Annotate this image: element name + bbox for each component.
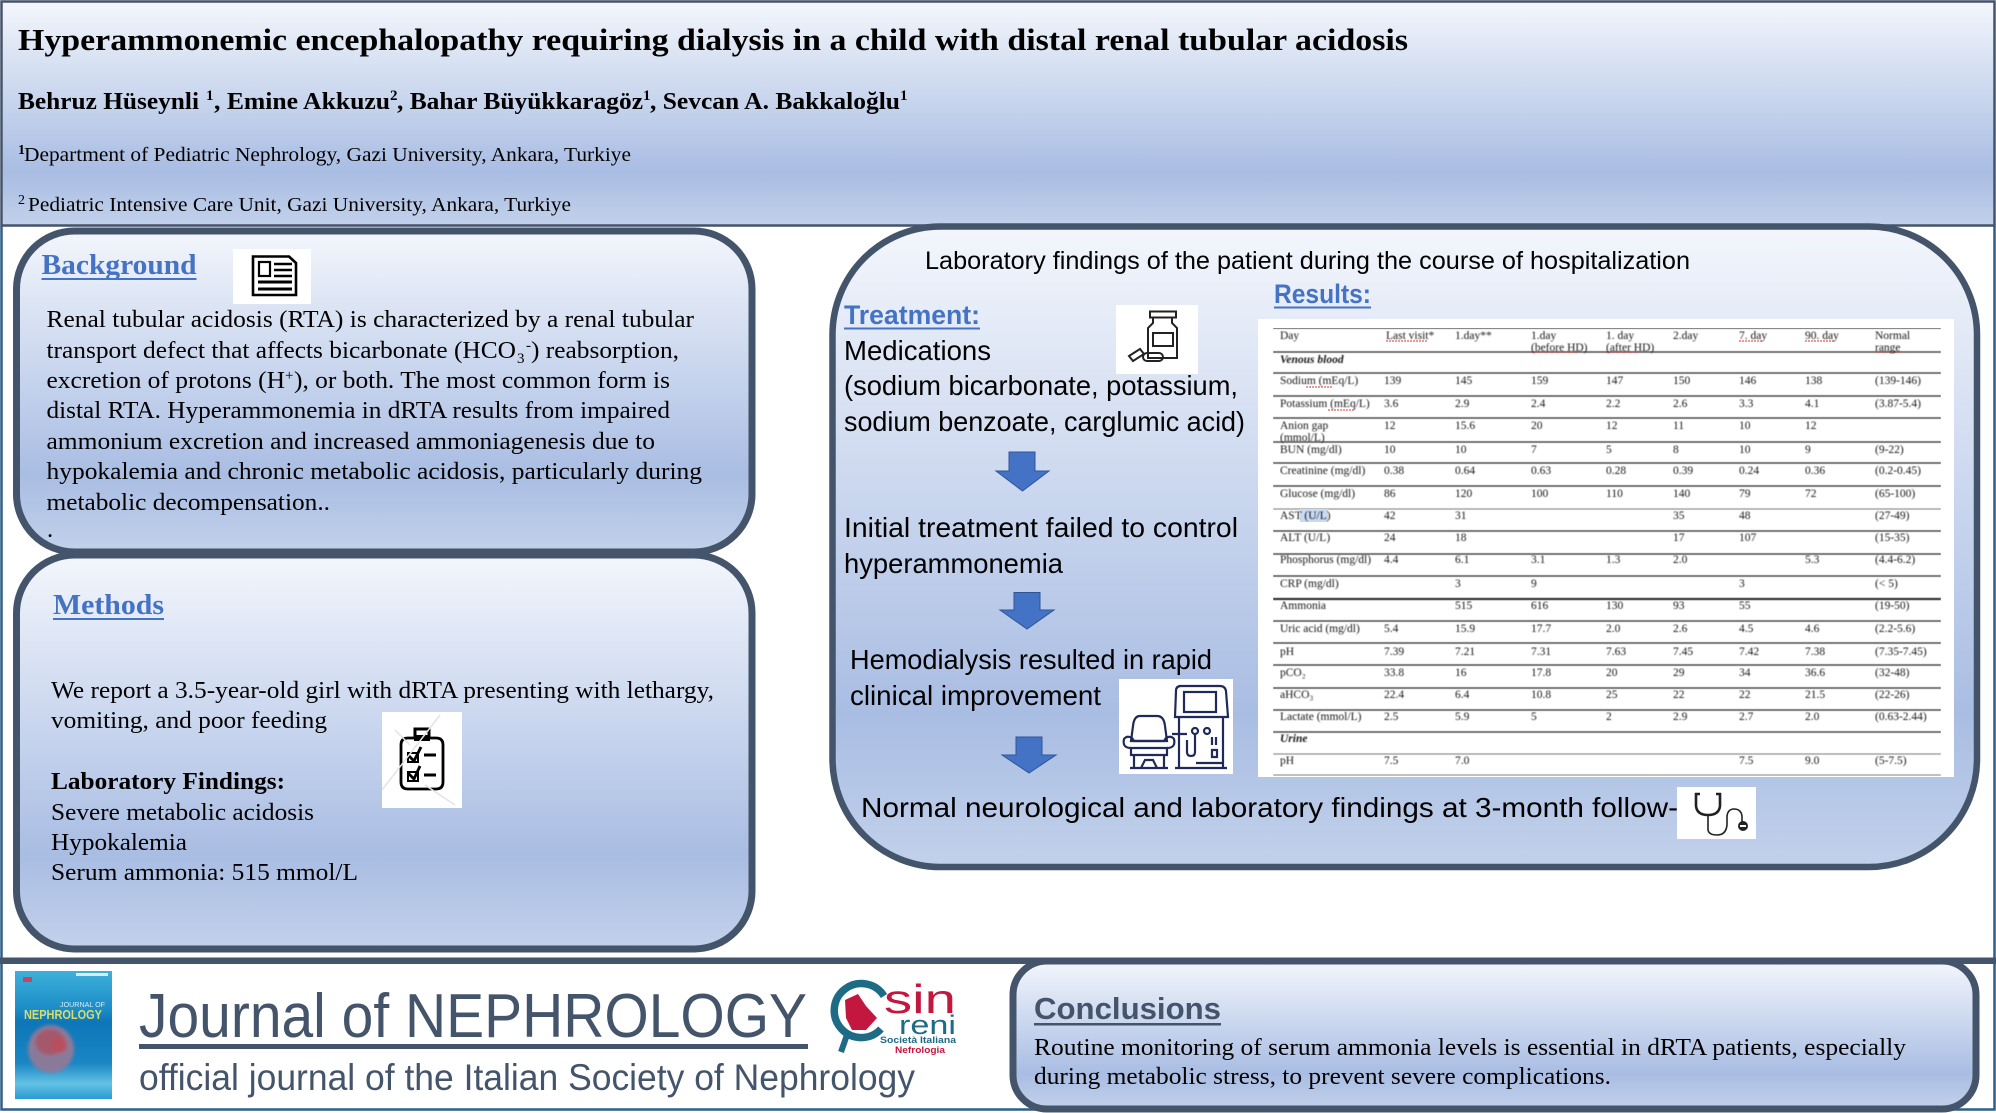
- table values: 12: [1805, 420, 1817, 432]
- table values: 3.6: [1384, 398, 1399, 410]
- affiliation 2: Pediatric Intensive Care Unit, Gazi University, Ankara, Turkiye: [28, 194, 571, 216]
- table values: 72: [1805, 488, 1817, 500]
- table values: 139: [1384, 375, 1402, 387]
- table values: 145: [1455, 375, 1472, 387]
- arrow 2: [1000, 592, 1054, 629]
- affiliation 1: 1: [18, 143, 25, 158]
- table values: AST (U/L): [1280, 510, 1331, 522]
- table values: 7.31: [1531, 646, 1551, 658]
- table values: 4.6: [1805, 623, 1820, 635]
- table values: 22.4: [1384, 689, 1404, 701]
- table values: 4.1: [1805, 398, 1820, 410]
- highlight: [1300, 509, 1328, 522]
- background text: [46, 306, 702, 543]
- table values: 2: [1606, 711, 1612, 723]
- table values: 10: [1739, 444, 1751, 456]
- table values: Sodium (mEq/L): [1280, 375, 1358, 387]
- table values: 2.0: [1673, 554, 1688, 566]
- table values: 2.6: [1673, 623, 1688, 635]
- table values: 17: [1673, 532, 1685, 544]
- authors: 1: [643, 88, 650, 104]
- table values: (before HD): [1531, 342, 1588, 354]
- table values: 5.3: [1805, 554, 1820, 566]
- table values: 2.6: [1673, 398, 1688, 410]
- table values: 107: [1739, 532, 1756, 544]
- table values: 25: [1606, 689, 1618, 701]
- methods text: We report a 3.5-year-old girl with dRTA presenting with lethargy,: [51, 677, 714, 704]
- step: initial treatment failed: Initial treatment failed to control: [844, 512, 1238, 543]
- table values: (32-48): [1875, 667, 1910, 679]
- table values: 20: [1531, 420, 1543, 432]
- affiliation 1: Department of Pediatric Nephrology, Gazi University, Ankara, Turkiye: [24, 144, 631, 166]
- authors: 2: [390, 88, 398, 104]
- table values: 36.6: [1805, 667, 1825, 679]
- table values: (9-22): [1875, 444, 1904, 456]
- table values: 9: [1805, 444, 1811, 456]
- spelling marks: [1306, 341, 1902, 410]
- background text: .: [47, 516, 53, 543]
- table values: 0.36: [1805, 465, 1825, 477]
- table values: 16: [1455, 667, 1467, 679]
- table values: 515: [1455, 600, 1472, 612]
- table values: 3.1: [1531, 554, 1546, 566]
- table values: pCO₂: [1280, 667, 1306, 679]
- table values: 5.9: [1455, 711, 1470, 723]
- table values: (0.2-0.45): [1875, 465, 1921, 477]
- panel: conclusions: [1013, 961, 1976, 1109]
- background text: metabolic decompensation..: [46, 489, 330, 516]
- authors: 1: [900, 88, 908, 104]
- table values: Last visit*: [1386, 330, 1434, 342]
- table values: 12: [1606, 420, 1618, 432]
- panel: methods: [16, 555, 752, 949]
- table values: 33.8: [1384, 667, 1404, 679]
- authors: , Emine Akkuzu: [214, 89, 390, 115]
- arrow 1: [996, 452, 1049, 491]
- table values: 7: [1531, 444, 1537, 456]
- background text: transport defect that affects bicarbonate (HCO: [46, 337, 516, 364]
- table values: (< 5): [1875, 578, 1898, 590]
- table values: 31: [1455, 510, 1467, 522]
- icon: dialysis machine: [1119, 679, 1233, 774]
- authors: , Bahar Büyükkaragöz: [397, 89, 643, 115]
- table values: 48: [1739, 510, 1751, 522]
- icon: clipboard: [382, 712, 462, 808]
- table values: 7.5: [1739, 755, 1754, 767]
- table values: 7.5: [1384, 755, 1399, 767]
- table values: 17.8: [1531, 667, 1551, 679]
- table: laboratory findings: [1258, 319, 1954, 777]
- table values: 7.21: [1455, 646, 1475, 658]
- table values: 93: [1673, 600, 1685, 612]
- table values: 616: [1531, 600, 1548, 612]
- table values: 5: [1531, 711, 1537, 723]
- background text: 3: [517, 351, 524, 367]
- logo: SIN: sin: [884, 976, 956, 1022]
- table values: CRP (mg/dl): [1280, 578, 1339, 590]
- methods text: Severe metabolic acidosis: [51, 799, 314, 826]
- table values: 7.38: [1805, 646, 1825, 658]
- heading: treatment: Treatment:: [844, 300, 980, 330]
- table values: 120: [1455, 488, 1472, 500]
- table values: 12: [1384, 420, 1396, 432]
- table values: 0.24: [1739, 465, 1759, 477]
- table values: 3: [1739, 578, 1745, 590]
- table values: (65-100): [1875, 488, 1915, 500]
- title: Hyperammonemic encephalopathy requiring dialysis in a child with distal renal tubular acidosis: [18, 22, 1408, 57]
- table values: 0.38: [1384, 465, 1404, 477]
- panel: treatment and results: [832, 226, 1977, 867]
- logo: SIN: Nefrologia: [895, 1045, 946, 1055]
- arrow 3: [1002, 737, 1056, 773]
- background text: distal RTA. Hyperammonemia in dRTA results from impaired: [46, 397, 670, 424]
- table values: 10: [1739, 420, 1751, 432]
- table values: (0.63-2.44): [1875, 711, 1927, 723]
- background text: +: [285, 368, 293, 384]
- table values: Lactate (mmol/L): [1280, 711, 1362, 723]
- conclusions text: [1034, 1034, 1907, 1090]
- table values: 1. day: [1606, 330, 1634, 342]
- table values: 6.4: [1455, 689, 1470, 701]
- table values: 110: [1606, 488, 1623, 500]
- table values: (after HD): [1606, 342, 1654, 354]
- table values: 2.0: [1805, 711, 1820, 723]
- journal cover: JOURNAL OF: [60, 1000, 105, 1009]
- table values: (3.87-5.4): [1875, 398, 1921, 410]
- table values: 9.0: [1805, 755, 1820, 767]
- header banner: [2, 2, 1994, 226]
- table values: 79: [1739, 488, 1751, 500]
- table values: 7.45: [1673, 646, 1693, 658]
- table values: 42: [1384, 510, 1396, 522]
- table values: 2.4: [1531, 398, 1546, 410]
- table caption: Laboratory findings of the patient during the course of hospitalization: [925, 247, 1690, 275]
- background text: ) reabsorption,: [531, 337, 679, 364]
- table values: (139-146): [1875, 375, 1921, 387]
- table values: aHCO₃: [1280, 689, 1313, 701]
- table values: ALT (U/L): [1280, 532, 1330, 544]
- journal name: Journal of NEPHROLOGY: [139, 982, 807, 1051]
- step: hemodialysis: [850, 644, 1212, 711]
- table values: 0.63: [1531, 465, 1551, 477]
- table values: 22: [1673, 689, 1685, 701]
- table values: 17.7: [1531, 623, 1551, 635]
- step: hemodialysis: Hemodialysis resulted in rapid: [850, 644, 1212, 675]
- table values: 8: [1673, 444, 1679, 456]
- affiliation 2: 2: [18, 193, 25, 208]
- authors: 1: [206, 88, 214, 104]
- table values: Ammonia: [1280, 600, 1326, 612]
- authors: [18, 88, 908, 115]
- step: initial treatment failed: [844, 512, 1238, 579]
- methods text: vomiting, and poor feeding: [51, 707, 327, 734]
- table values: 3.3: [1739, 398, 1754, 410]
- table values: 34: [1739, 667, 1751, 679]
- table values: 55: [1739, 600, 1751, 612]
- table values: Normal: [1875, 330, 1910, 342]
- table values: 20: [1606, 667, 1618, 679]
- table values: 21.5: [1805, 689, 1825, 701]
- table values: 130: [1606, 600, 1624, 612]
- panel: background: [16, 231, 752, 552]
- background text: excretion of protons (H: [46, 367, 285, 394]
- table values: 7.0: [1455, 755, 1470, 767]
- table values: 5.4: [1384, 623, 1399, 635]
- table values: Creatinine (mg/dl): [1280, 465, 1365, 477]
- table values: [1280, 330, 1927, 767]
- table values: (7.35-7.45): [1875, 646, 1927, 658]
- logo: SIN: [834, 976, 957, 1055]
- table values: 11: [1673, 420, 1684, 432]
- table values: (mmol/L): [1280, 432, 1325, 444]
- table values: (27-49): [1875, 510, 1910, 522]
- table values: (2.2-5.6): [1875, 623, 1915, 635]
- table values: 1.3: [1606, 554, 1621, 566]
- background text: ammonium excretion and increased ammoniagenesis due to: [46, 428, 655, 455]
- table values: 18: [1455, 532, 1467, 544]
- table values: 0.64: [1455, 465, 1475, 477]
- background text: hypokalemia and chronic metabolic acidosis, particularly during: [46, 458, 702, 485]
- table values: 2.day: [1673, 330, 1698, 342]
- table values: 138: [1805, 375, 1822, 387]
- table values: 2.5: [1384, 711, 1399, 723]
- table values: Potassium (mEq/L): [1280, 398, 1370, 410]
- table values: 5: [1606, 444, 1612, 456]
- step: medications: sodium benzoate, carglumic acid): [844, 406, 1245, 437]
- table values: 7.39: [1384, 646, 1404, 658]
- table values: 3: [1455, 578, 1461, 590]
- logo: SIN: Società Italiana: [880, 1035, 957, 1045]
- methods text: Laboratory Findings:: [51, 768, 285, 795]
- authors: Behruz Hüseynli: [18, 89, 199, 115]
- methods text: Serum ammonia: 515 mmol/L: [51, 859, 358, 886]
- table values: Venous blood: [1280, 354, 1344, 366]
- table values: 86: [1384, 488, 1396, 500]
- table values: 2.9: [1673, 711, 1688, 723]
- logo: SIN: reni: [899, 1010, 956, 1040]
- methods text: Hypokalemia: [51, 829, 187, 856]
- table values: Urine: [1280, 733, 1307, 745]
- table values: 2.0: [1606, 623, 1621, 635]
- conclusions text: Routine monitoring of serum ammonia levels is essential in dRTA patients, especially: [1034, 1034, 1907, 1061]
- table values: 15.9: [1455, 623, 1475, 635]
- step: medications: [844, 335, 1245, 437]
- table values: Uric acid (mg/dl): [1280, 623, 1360, 635]
- table values: 10.8: [1531, 689, 1551, 701]
- step: medications: Medications: [844, 335, 991, 366]
- table values: 7.63: [1606, 646, 1626, 658]
- table values: 150: [1673, 375, 1690, 387]
- table values: 10: [1384, 444, 1396, 456]
- table values: Anion gap: [1280, 420, 1328, 432]
- table values: 159: [1531, 375, 1548, 387]
- table values: Day: [1280, 330, 1299, 342]
- table values: (19-50): [1875, 600, 1910, 612]
- background text: -: [526, 338, 531, 354]
- methods text: [51, 677, 714, 886]
- step: follow-up: Normal neurological and laboratory findings at 3-month follow-up: [861, 792, 1711, 823]
- table values: (15-35): [1875, 532, 1910, 544]
- heading: methods: Methods: [53, 589, 164, 621]
- journal cover: [15, 971, 112, 1099]
- table values: (4.4-6.2): [1875, 554, 1915, 566]
- table values: 0.39: [1673, 465, 1693, 477]
- table values: 2.9: [1455, 398, 1470, 410]
- table values: 22: [1739, 689, 1751, 701]
- icon: medicine bottle: [1116, 305, 1198, 374]
- table values: 140: [1673, 488, 1690, 500]
- heading: background: Background: [42, 249, 197, 281]
- page frame: [2, 226, 1994, 1110]
- step: medications: (sodium bicarbonate, potassium,: [844, 370, 1238, 401]
- table values: 4.5: [1739, 623, 1754, 635]
- background text: Renal tubular acidosis (RTA) is characterized by a renal tubular: [46, 306, 694, 333]
- table values: 1.day: [1531, 330, 1556, 342]
- table values: 10: [1455, 444, 1467, 456]
- table values: 90. day: [1805, 330, 1839, 342]
- table values: 7.42: [1739, 646, 1759, 658]
- footer divider band: [0, 958, 1996, 964]
- table values: 100: [1531, 488, 1548, 500]
- table values: (5-7.5): [1875, 755, 1907, 767]
- table values: Glucose (mg/dl): [1280, 488, 1355, 500]
- table values: 2.2: [1606, 398, 1621, 410]
- table values: Phosphorus (mg/dl): [1280, 554, 1371, 566]
- table values: 24: [1384, 532, 1396, 544]
- table values: 147: [1606, 375, 1624, 387]
- table values: 146: [1739, 375, 1756, 387]
- table values: 35: [1673, 510, 1685, 522]
- journal cover: NEPHROLOGY: [24, 1008, 103, 1022]
- table values: 29: [1673, 667, 1685, 679]
- table values: 4.4: [1384, 554, 1399, 566]
- table rules: [1273, 328, 1941, 776]
- conclusions text: during metabolic stress, to prevent severe complications.: [1034, 1063, 1611, 1090]
- table values: 6.1: [1455, 554, 1470, 566]
- step: initial treatment failed: hyperammonemia: [844, 548, 1063, 579]
- table values: range: [1875, 342, 1901, 354]
- table values: pH: [1280, 755, 1294, 767]
- table values: BUN (mg/dl): [1280, 444, 1342, 456]
- table values: 0.28: [1606, 465, 1626, 477]
- step: hemodialysis: clinical improvement: [850, 680, 1101, 711]
- icon: document: [233, 249, 311, 304]
- authors: , Sevcan A. Bakkaloğlu: [650, 89, 900, 115]
- journal subtitle: official journal of the Italian Society of Nephrology: [139, 1057, 915, 1098]
- table values: 2.7: [1739, 711, 1754, 723]
- table values: (22-26): [1875, 689, 1910, 701]
- table values: pH: [1280, 646, 1294, 658]
- table values: 7. day: [1739, 330, 1767, 342]
- heading: conclusions: Conclusions: [1034, 991, 1221, 1026]
- table values: 1.day**: [1455, 330, 1492, 342]
- heading: results: Results:: [1274, 279, 1371, 309]
- table values: 15.6: [1455, 420, 1475, 432]
- background text: ), or both. The most common form is: [294, 367, 670, 394]
- icon: stethoscope: [1677, 787, 1756, 839]
- table values: 9: [1531, 578, 1537, 590]
